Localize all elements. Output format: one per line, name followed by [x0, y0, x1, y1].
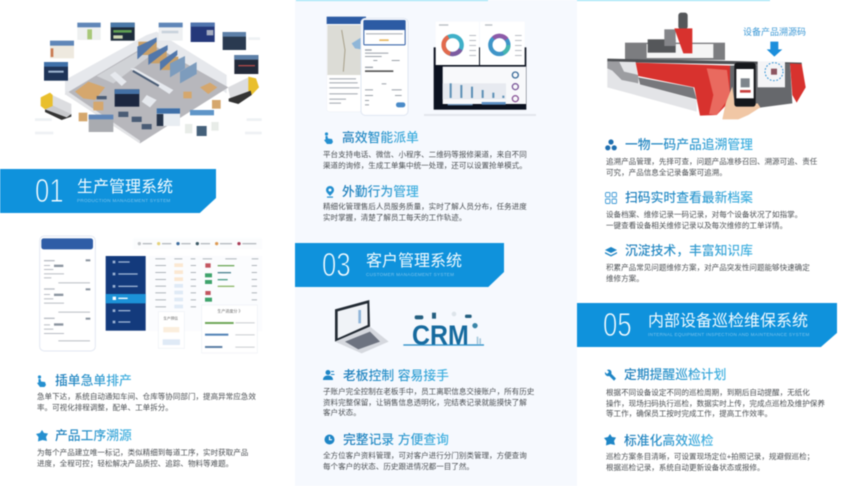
panel: customer service: [295, 0, 577, 486]
text: field behavior description: [322, 202, 527, 222]
text: scheduled reminders description: [606, 388, 825, 418]
text: knowledge base description: [606, 263, 810, 283]
heading: field behavior management: 外勤行为管理: [342, 184, 419, 199]
heading: product process tracing: 产品工序溯源: [55, 428, 132, 443]
heading: scan for latest records: 扫码实时查看最新档案: [625, 190, 753, 205]
text: knowledge base description: 积累产品常见问题维修方案，对产品突发性问题能够快速确定: [606, 263, 810, 272]
heading: standardized inspection: 标准化高效巡检: [624, 433, 714, 448]
arrow: down to code: [766, 40, 783, 58]
banner title: 内部设备巡检维保系统: [648, 313, 808, 330]
text: standardized inspection description: [606, 452, 814, 472]
text: dispatch description: 渠道的询修，生成工单集中统一处理，还可以设置抢单模式。: [323, 161, 527, 170]
banner title: 客户管理系统: [366, 253, 462, 270]
icon: wrench: [604, 368, 616, 382]
CRM illustration: [402, 312, 485, 350]
heading: rush order scheduling: 插单急单排产: [55, 373, 132, 388]
banner number: 01: [35, 172, 64, 209]
banner number: 03: [322, 246, 351, 283]
text: field behavior description: 精细化管理售后人员服务质量，实时了解人员分布，任务进度: [323, 202, 527, 211]
icon: user: [322, 369, 336, 381]
icon: location pin: [325, 185, 335, 198]
banner title: 生产管理系统: [77, 179, 173, 196]
text: process tracing description: 为每个产品建立唯一标记，类似精细到每道工序，实时获取产品: [37, 448, 248, 457]
text: knowledge base description: 维修方案。: [606, 274, 644, 283]
heading: one item one code: 一物一码产品追溯管理: [625, 137, 753, 152]
truck right: [228, 77, 259, 104]
analytics laptop mockup: [424, 22, 536, 116]
panel: equipment traceability: [576, 0, 838, 472]
text: complete records description: 每个客户的状态、历史跟进情况都一目了然。: [323, 462, 474, 471]
text: dispatch description: 平台支持电话、微信、小程序、二维码等报修渠道，来自不同: [323, 150, 527, 159]
banner 03: [295, 243, 504, 287]
text: scheduled reminders description: 操作，现场扫码执行巡检，数据实时上传，完成点巡检及维护保养: [606, 399, 825, 408]
laser machine illustration: [606, 12, 806, 120]
text: scheduled reminders description: 等工作，确保员工按时完成工作，提高工作效率。: [606, 409, 772, 418]
factory illustration: [35, 22, 262, 144]
heading: knowledge base: 沉淀技术，丰富知识库: [625, 243, 753, 258]
text: standardized inspection description: 根据巡检记录，系统自动更新设备状态或报修。: [606, 463, 764, 472]
heading: scheduled reminders: 定期提醒巡检计划: [624, 367, 726, 382]
text: scan description: 设备档案、维修记录一码记录，对每个设备状况了如指掌。: [606, 210, 802, 219]
text: scheduled reminders description: 根据不同设备设定不同的巡检周期，到期后自动提醒，无纸化: [606, 388, 810, 397]
banner subtitle: PRODUCTION MANAGEMENT SYSTEM: [77, 198, 171, 203]
icon: hand tap: [324, 132, 334, 145]
banner subtitle: INTERNAL EQUIPMENT INSPECTION AND MAINTENANCE SYSTEM: [648, 332, 810, 337]
text: rush order description: [36, 392, 256, 412]
text: complete records description: [322, 451, 528, 471]
laptop illustration: [334, 299, 388, 354]
heading: boss control: 老板控制 容易接手: [343, 368, 449, 383]
text: scan description: 一键查看设备相关维修记录以及每次维修的工单详情。: [606, 221, 787, 230]
text: process tracing description: [36, 448, 248, 468]
icon: clock: [324, 434, 336, 446]
icon: hand tap: [36, 374, 47, 388]
banner number: 05: [603, 306, 632, 343]
text: one item one code description: [606, 157, 818, 177]
icon: layers: [604, 246, 618, 258]
top accent line: [296, 0, 488, 1]
text: process tracing description: 进度，全程可控；轻松解决产品质控、追踪、物料等难题。: [37, 459, 233, 468]
text: dispatch description: [322, 150, 527, 170]
dashboard mockup: 生产预估: [163, 315, 178, 320]
text: complete records description: 全方位客户资料管理，可对客户进行分门别类管理，方便查询: [323, 451, 527, 460]
text: rush order description: 急单下达，系统自动通知车间、仓库等协同部门，提高异常应急效: [37, 392, 256, 401]
truck left: [41, 93, 71, 120]
label: equipment trace code: 设备产品溯源码: [743, 27, 806, 37]
text: standardized inspection description: 巡检方案条目清晰，可设置现场定位+拍照记录，规避假巡检；: [606, 452, 814, 461]
top accent line: [577, 0, 770, 1]
dashboard mockup: [104, 241, 259, 353]
dashboard mockup: 生产进度分 》: [217, 307, 242, 313]
panel: production management: [0, 22, 262, 468]
banner subtitle: CUSTOMER MANAGEMENT SYSTEM: [366, 272, 454, 277]
banner 05: [577, 303, 837, 347]
text: one item one code description: 可究，产品信息全记录备案可追溯。: [606, 168, 727, 177]
text: boss control description: 资料完整保留，让销售信息透明化，完结表记录就能摸快了解: [323, 398, 527, 407]
heading: complete records: 完整记录 方便查询: [343, 432, 449, 447]
text: field behavior description: 实时掌握，清楚了解员工每天的工作轨迹。: [323, 213, 466, 222]
text: boss control description: 客户状态。: [323, 408, 361, 417]
icon: three circles: [604, 138, 618, 152]
text: one item one code description: 追溯产品管理，先择可查，问题产品准移召回、溯源可追、责任: [606, 157, 817, 166]
icon: qr code: [604, 191, 618, 205]
CRM illustration: CRM: [412, 319, 469, 350]
text: boss control description: 子账户完全控制在老板手中，员工离职信息交接账户，所有历史: [323, 387, 534, 396]
field service phones: [326, 16, 408, 116]
text: boss control description: [322, 387, 534, 417]
text: rush order description: 率。可视化排程调整，配单、工单拆分。: [37, 403, 173, 412]
banner 01: [0, 169, 216, 213]
mobile app mockup: [39, 235, 96, 352]
icon: puzzle: [36, 430, 48, 442]
heading: smart dispatch: 高效智能派单: [342, 130, 419, 145]
text: scan description: [606, 210, 802, 230]
icon: puzzle: [604, 434, 616, 446]
